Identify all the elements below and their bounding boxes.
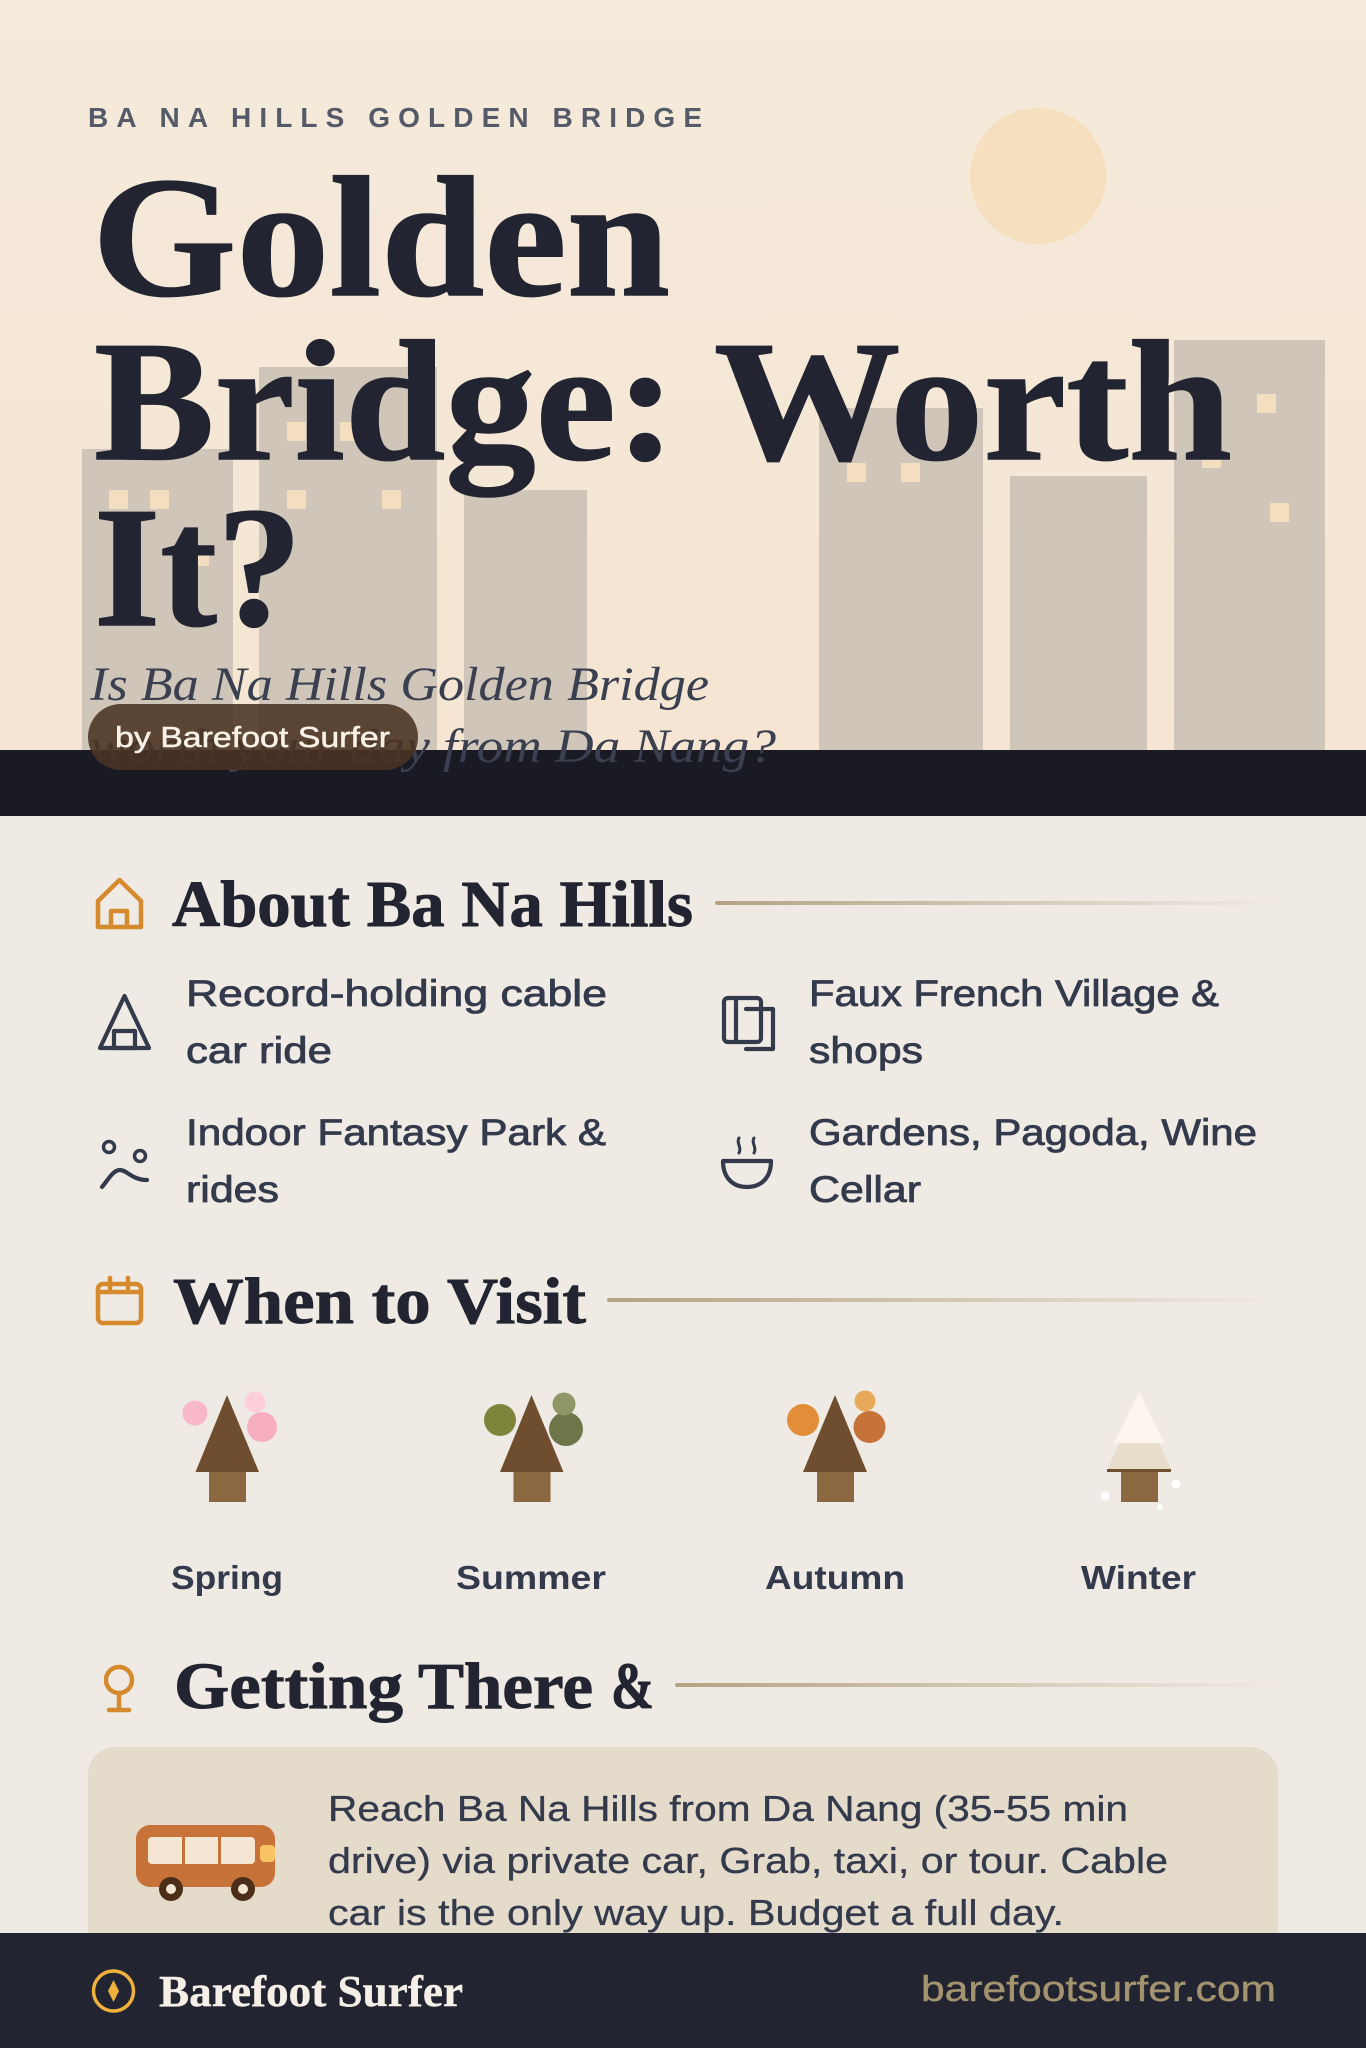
building windows — [109, 394, 1289, 566]
subtitle: Is Ba Na Hills Golden Bridge — [89, 658, 709, 711]
heading: getting there: Getting — [174, 1650, 403, 1723]
brand name: Barefoot Surfer — [159, 1967, 463, 2016]
season: autumn — [765, 1390, 905, 1596]
author pill — [88, 704, 418, 770]
title — [92, 143, 1232, 663]
item: gardens: Gardens, Pagoda, Wine — [809, 1112, 1257, 1153]
heading: getting there — [174, 1650, 654, 1723]
item: fantasy park: rides — [186, 1169, 279, 1210]
author pill: by Barefoot Surfer — [115, 722, 390, 754]
icon: bus — [136, 1825, 275, 1901]
item: french village — [724, 973, 1219, 1071]
footer — [0, 1933, 1366, 2048]
transport text — [328, 1788, 1168, 1933]
icon: compass — [94, 1971, 134, 2011]
skyline buildings — [82, 340, 1325, 760]
subtitle: worth your day — [90, 720, 431, 773]
icon: house — [98, 880, 141, 927]
sun — [970, 108, 1106, 244]
heading: about: About Ba Na Hills — [172, 868, 693, 941]
season: summer — [456, 1392, 606, 1596]
item: gardens — [723, 1112, 1257, 1210]
title: Golden — [92, 143, 670, 333]
icon: signpost — [106, 1667, 132, 1710]
transport text: drive) via private car, Grab, taxi, or tour. Cable — [328, 1840, 1168, 1881]
item: french village: shops — [809, 1030, 923, 1071]
item: fantasy park: Indoor Fantasy Park & — [186, 1112, 606, 1153]
heading: when: When to Visit — [173, 1265, 586, 1338]
section: getting there — [88, 1650, 1278, 1977]
season: spring: Spring — [171, 1559, 283, 1596]
subtitle: from Da Nang? — [443, 720, 776, 773]
section: about Ba Na Hills — [98, 868, 1278, 1210]
season: winter: Winter — [1081, 1559, 1196, 1596]
item: french village: Faux French Village & — [809, 973, 1219, 1014]
heading: getting there: & — [611, 1650, 654, 1723]
item: cable car: car ride — [186, 1030, 332, 1071]
heading: getting there: There — [418, 1650, 593, 1723]
dark band — [0, 750, 1366, 816]
transport text: car is the only way up. Budget a full day. — [328, 1892, 1064, 1933]
item: cable car — [100, 973, 607, 1071]
title: Worth — [714, 307, 1232, 497]
subtitle — [89, 658, 776, 773]
website: barefootsurfer.com — [921, 1968, 1276, 2009]
item: fantasy park — [102, 1112, 606, 1210]
title: Bridge: — [94, 307, 676, 497]
eyebrow: BA NA HILLS GOLDEN BRIDGE — [88, 102, 702, 133]
season: winter — [1081, 1392, 1196, 1596]
icon: calendar — [98, 1278, 141, 1323]
section: when to visit — [98, 1265, 1278, 1596]
panel: hero header — [0, 0, 1366, 816]
item: gardens: Cellar — [809, 1169, 921, 1210]
title: It? — [94, 473, 302, 663]
season: spring — [171, 1392, 283, 1596]
season: autumn: Autumn — [765, 1559, 905, 1596]
item: cable car: Record-holding cable — [186, 973, 607, 1014]
season: summer: Summer — [456, 1559, 606, 1596]
transport text: Reach Ba Na Hills from Da Nang (35-55 min — [328, 1788, 1128, 1829]
card: transport — [88, 1747, 1278, 1977]
